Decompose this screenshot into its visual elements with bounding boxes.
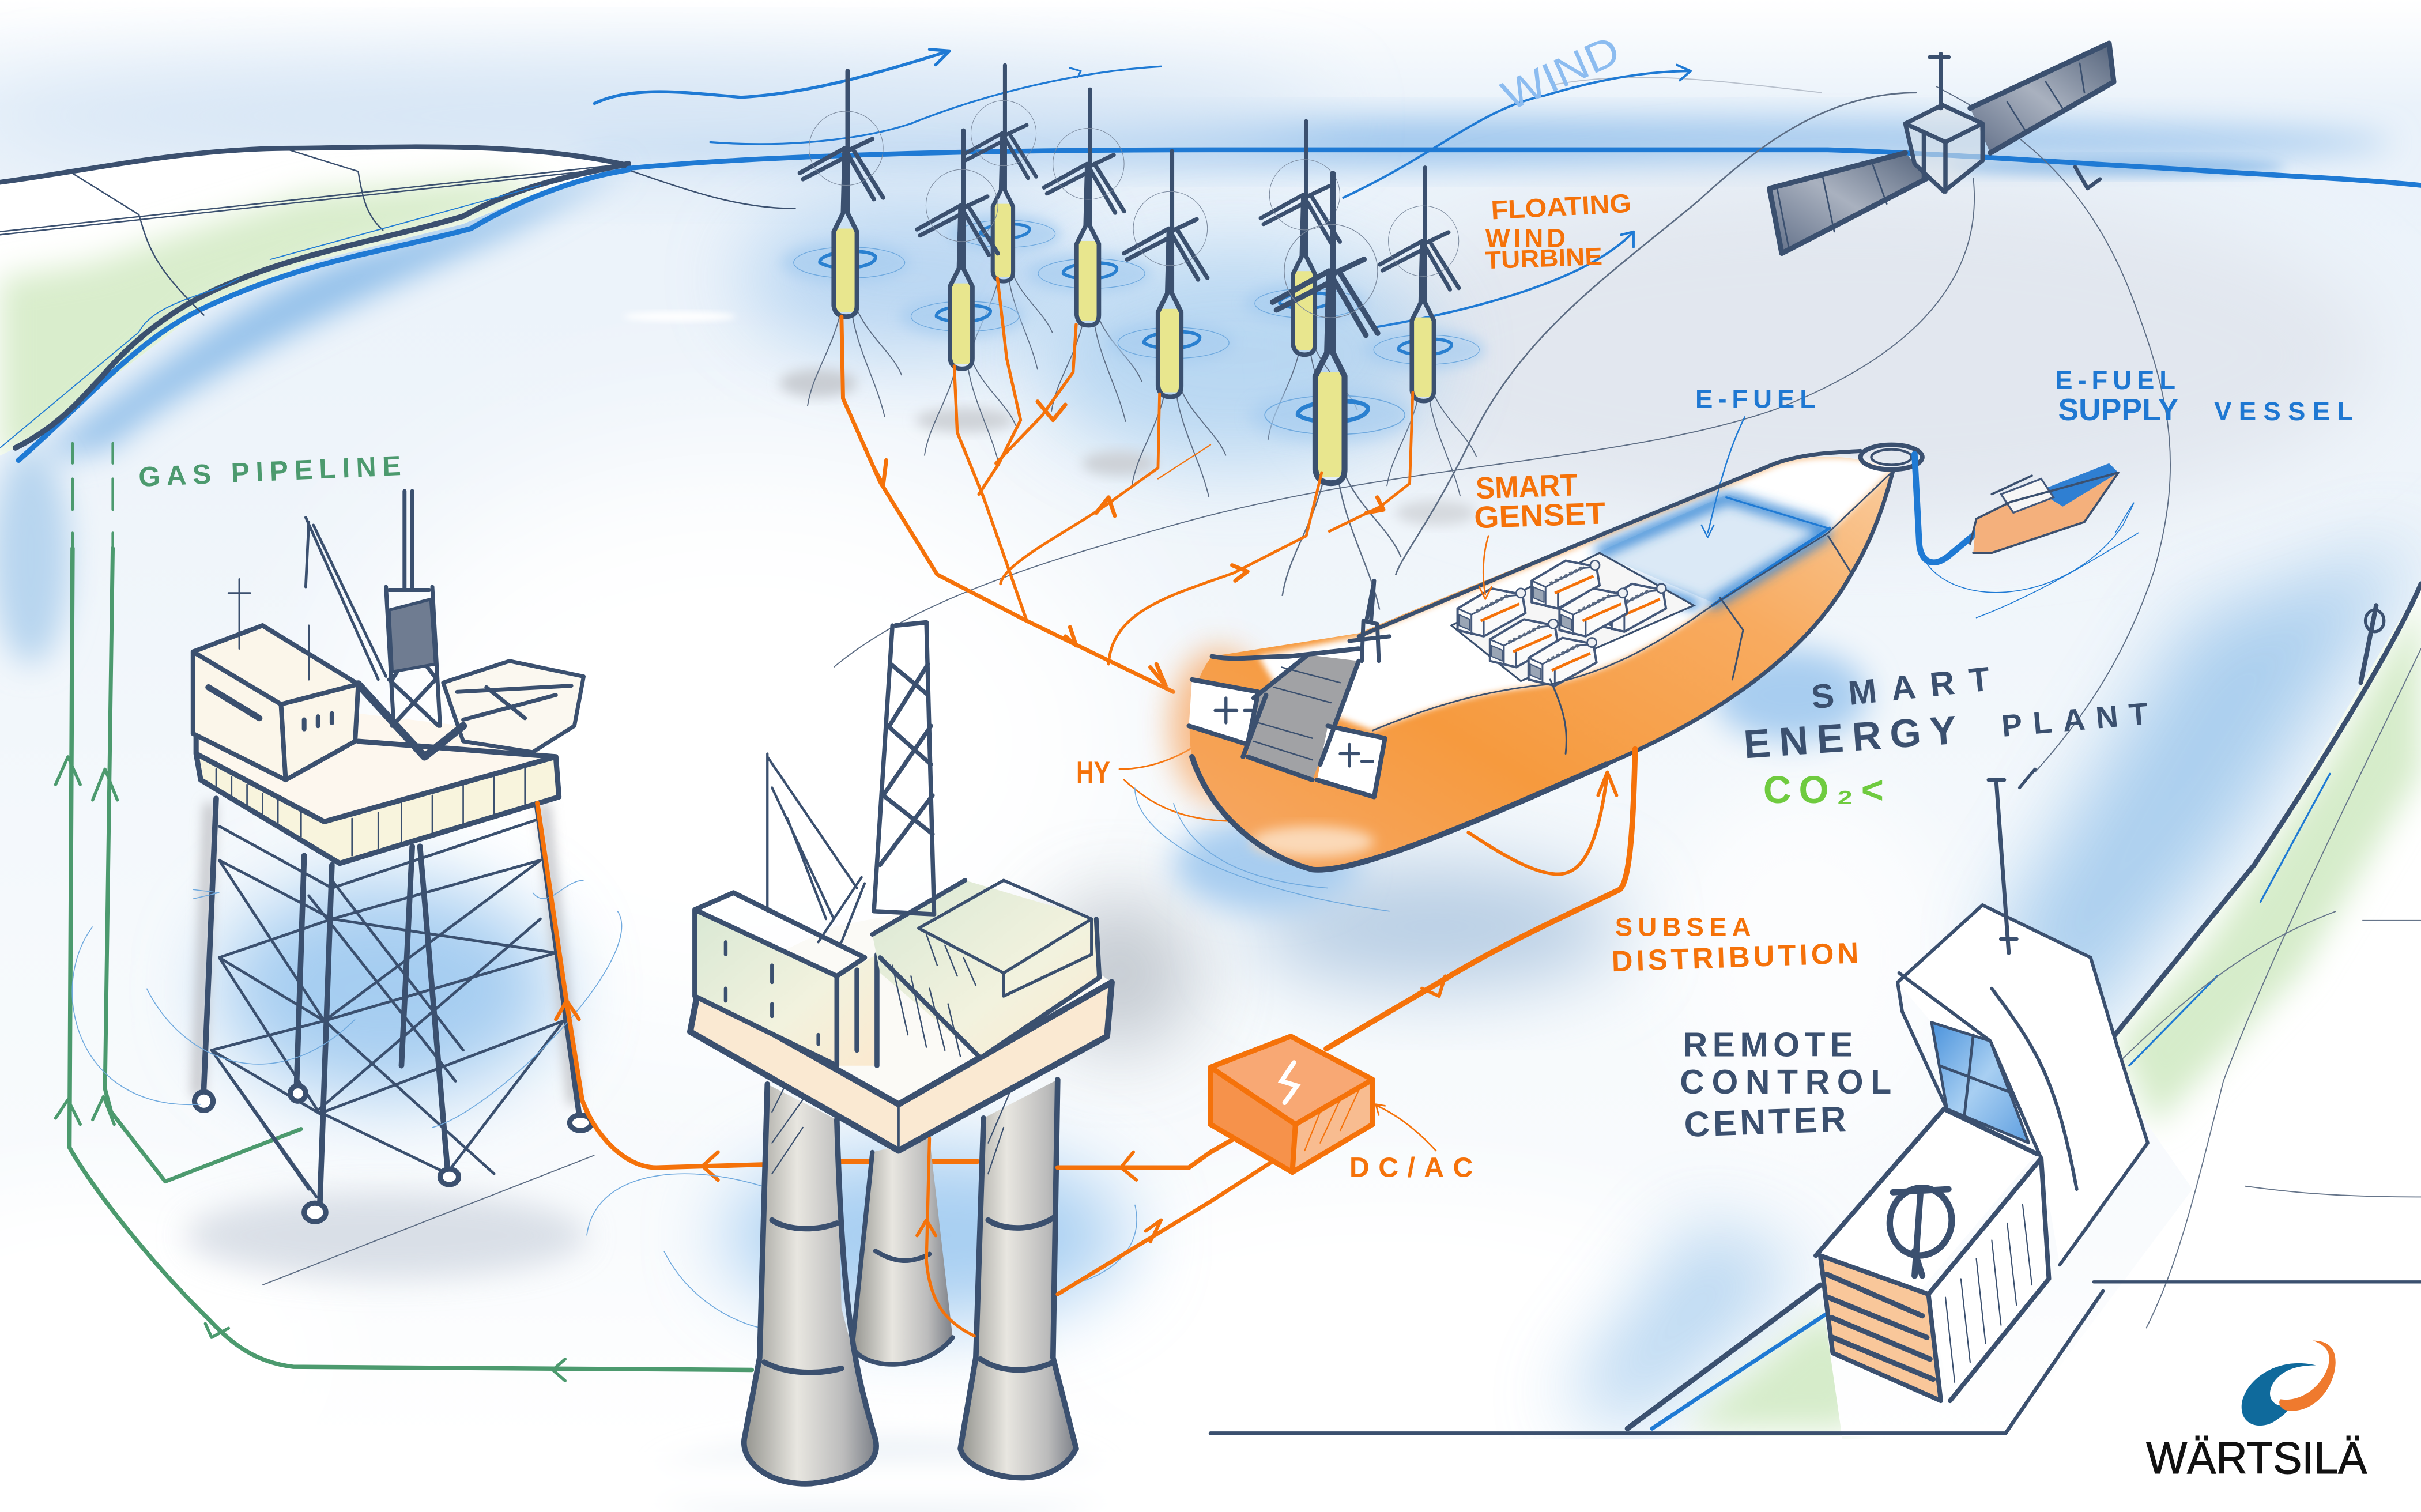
console top (1816, 1109, 2037, 1289)
label: smart genset: SMART (1475, 468, 1578, 506)
hull body (1190, 457, 1893, 870)
feet (195, 1086, 591, 1221)
solar panel right (1970, 43, 2114, 153)
logo mark blue crescent (2242, 1363, 2316, 1426)
arrow: wind streams (594, 50, 1691, 327)
left face (1210, 1067, 1295, 1172)
label: e-fuel supply vessel: SUPPLY (2058, 393, 2178, 427)
orange cables: wind farm to ship (842, 278, 1413, 692)
turbine 7 (1249, 174, 1413, 610)
buoy mast (2361, 605, 2384, 683)
right module (872, 880, 1099, 1058)
label: subsea distribution: SUBSEA (1615, 913, 1751, 942)
label: e-fuel supply vessel (2055, 365, 2353, 427)
accommodation module (193, 625, 358, 780)
deck (1258, 458, 1893, 730)
stern structure (1189, 580, 1390, 797)
console roof (1898, 905, 2148, 1265)
land: right coast fill (1158, 584, 2421, 1512)
label: smart energy plant (1742, 661, 2150, 767)
leg shadow (198, 803, 574, 1104)
turbine 8 (1362, 168, 1485, 496)
ripples (587, 1174, 1137, 1328)
hull outline (1192, 757, 1606, 870)
vessel deck (2038, 463, 2118, 507)
label: e-fuel supply vessel: VESSEL (2214, 397, 2353, 426)
label: gas pipeline: GAS PIPELINE (138, 450, 401, 493)
coastline: right (1627, 584, 2421, 1428)
right face (1292, 1080, 1372, 1172)
turbine 1 (781, 71, 911, 417)
bow ring (1861, 445, 1922, 469)
frame lines (1210, 1282, 2421, 1433)
legs (204, 797, 579, 1211)
orange cable: inverter to platform (917, 1128, 1289, 1336)
label: floating wind turbine (1484, 188, 1632, 274)
label: smart energy plant: PLANT (2000, 697, 2150, 744)
curves: satellite signals (834, 77, 2170, 772)
label: CO2 reduced: CO₂< (1763, 768, 1884, 812)
label: remote control center (1680, 1027, 1891, 1145)
satellite (1770, 43, 2114, 253)
label: e-fuel supply vessel: E-FUEL (2055, 365, 2175, 395)
orange cable: subsea from ship to inverter (1326, 749, 1635, 1049)
orange cable: column to jacket (537, 803, 978, 1180)
label: remote control center: CENTER (1683, 1099, 1847, 1145)
ripples (72, 880, 621, 1128)
derrick (386, 491, 440, 726)
label: smart genset (1473, 468, 1606, 599)
jacket shadow lines (262, 1155, 594, 1285)
fuel hose (1914, 454, 1986, 563)
land: left coast fill (0, 147, 628, 463)
logo wordmark: WÄRTSILÄ (2146, 1434, 2367, 1483)
top face (1210, 1036, 1372, 1125)
turbine 4 (1026, 90, 1151, 422)
label: remote control center: REMOTE (1683, 1027, 1853, 1064)
label: smart genset: GENSET (1473, 496, 1606, 535)
label: subsea distribution (1611, 913, 1859, 978)
orange cable: HY lines (1119, 726, 1294, 821)
label: wind: WIND (1495, 27, 1627, 120)
deck front (196, 753, 559, 864)
helideck (443, 661, 583, 752)
jacket platform (72, 491, 621, 1285)
label: remote control center: CONTROL (1680, 1064, 1891, 1101)
green gas pipelines (55, 443, 752, 1381)
label: HY: HY (1076, 756, 1110, 790)
ship glow (1170, 648, 1269, 803)
engines (1458, 561, 1666, 686)
label: smart energy plant: ENERGY (1742, 707, 1958, 767)
vessel hull (1973, 473, 2118, 553)
label: e-fuel: E-FUEL (1695, 384, 1816, 413)
water ripples (1135, 787, 1390, 911)
deck top (698, 896, 1112, 1104)
label: DC/AC (1349, 1104, 1473, 1183)
console front (1820, 1255, 1941, 1401)
remote control center console (1816, 769, 2148, 1401)
label: floating wind turbine: WIND (1485, 224, 1566, 253)
satellite body (1905, 105, 1982, 191)
icon: steering wheel (1883, 1182, 1958, 1276)
label: floating wind turbine: TURBINE (1484, 243, 1603, 274)
supply vessel (1927, 463, 2139, 618)
console side (1929, 1158, 2049, 1401)
semi-submersible platform (587, 623, 1137, 1484)
turbine 2 (899, 131, 1025, 466)
turbine 5 (1106, 152, 1235, 497)
logo: Wärtsilä (2146, 1341, 2367, 1483)
inverter box (1210, 1036, 1372, 1172)
blue fuel tank (1597, 417, 1830, 605)
genset bay (1451, 553, 1694, 686)
label: smart energy plant: SMART (1809, 661, 1992, 717)
antenna (1989, 780, 2016, 953)
crane (767, 753, 865, 942)
icon: lightning bolt (1281, 1062, 1297, 1103)
deck top (196, 704, 556, 821)
label: subsea distribution: DISTRIBUTION (1611, 936, 1859, 978)
turbine 6 (1243, 122, 1366, 450)
rear column (853, 1138, 953, 1364)
left module (695, 910, 877, 1066)
label: floating wind turbine: FLOATING (1490, 188, 1632, 225)
coastline: left (0, 147, 795, 460)
logo mark orange swoosh (2279, 1341, 2336, 1411)
right column (960, 1080, 1076, 1477)
braces (212, 819, 564, 1197)
left column (744, 1084, 876, 1484)
turbine 3 (946, 65, 1061, 369)
label: DC/AC: DC/AC (1349, 1152, 1473, 1183)
deck faces (690, 982, 1112, 1151)
crane (306, 518, 386, 680)
console window (1932, 1023, 2029, 1143)
derrick tower (874, 623, 934, 914)
smart energy ship (1135, 417, 1922, 911)
horizon line (628, 149, 2421, 186)
floating wind turbines (781, 65, 1485, 610)
solar panel left (1770, 153, 1929, 253)
